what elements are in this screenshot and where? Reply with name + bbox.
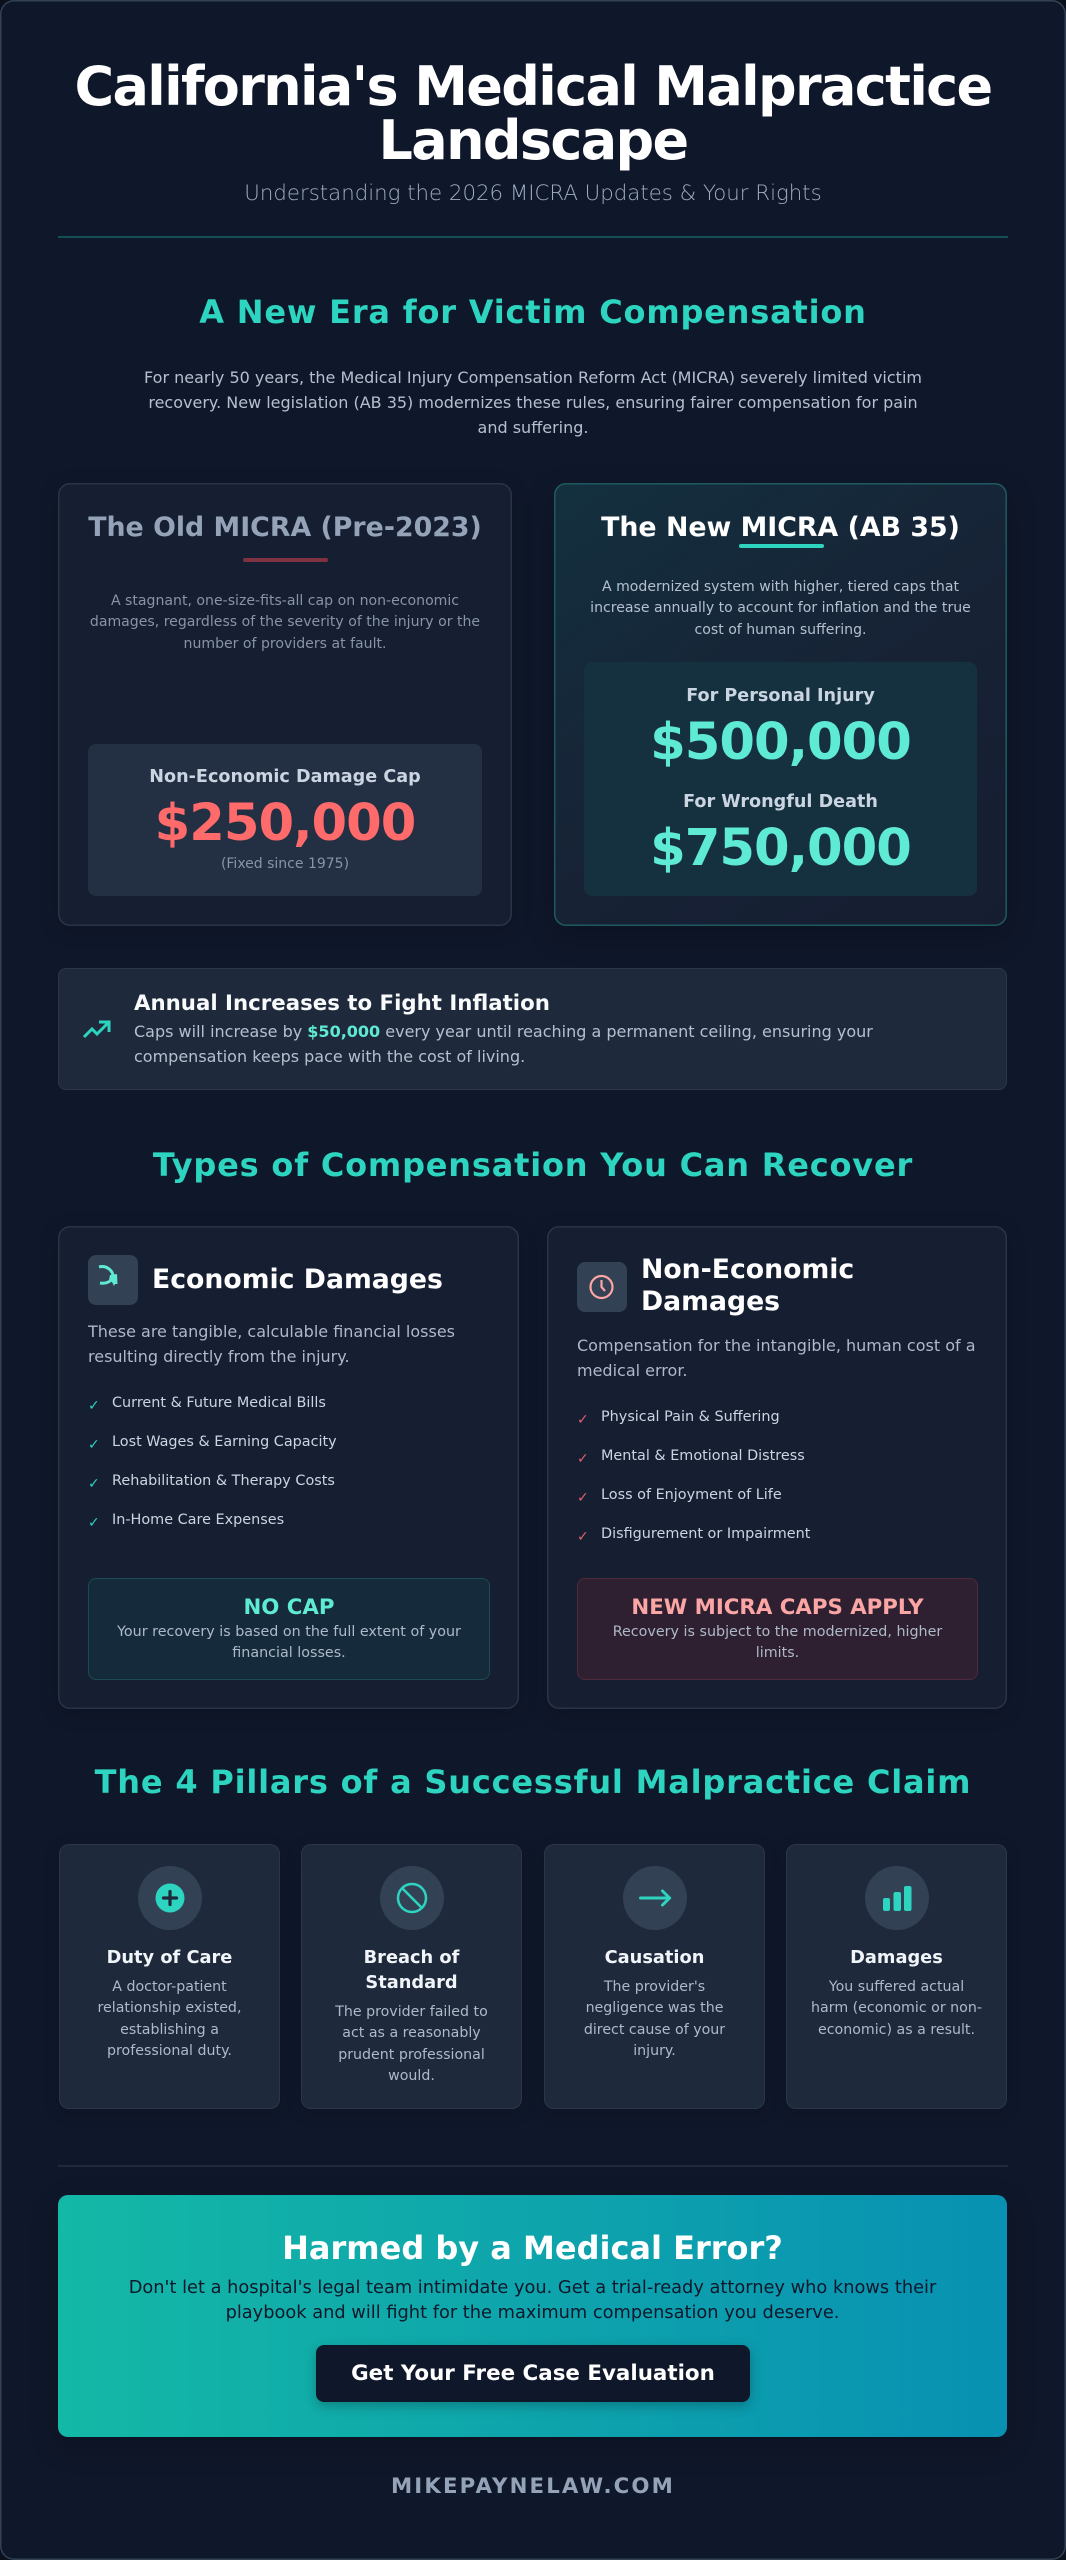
old cap box <box>88 744 482 896</box>
cap note: (Fixed since 1975) <box>221 856 349 872</box>
callout text: Caps will increase by $50,000 every year until reaching a permanent ceiling, ensuring your <box>134 1022 873 1041</box>
pillar text: You suffered actual <box>829 1979 964 1995</box>
icon: arrow <box>623 1866 687 1930</box>
header divider <box>58 236 1008 238</box>
icon: economic <box>88 1255 138 1305</box>
pillar text: The provider failed to <box>335 2004 488 2020</box>
non-economic list: ✓ <box>577 1529 589 1545</box>
wrongful death label: For Wrongful Death <box>683 792 878 812</box>
non-economic description <box>577 1336 976 1380</box>
new MICRA heading: The New MICRA (AB 35) <box>601 512 960 543</box>
callout heading: Annual Increases to Fight Inflation <box>134 991 550 1016</box>
pillar title: Duty of Care <box>107 1947 232 1968</box>
pillar text: The provider's <box>604 1979 705 1995</box>
title <box>74 55 992 172</box>
subtitle: Understanding the 2026 MICRA Updates & Your Rights <box>244 181 822 206</box>
callout: no cap <box>88 1578 490 1680</box>
economic description <box>88 1322 455 1366</box>
panel: non-economic damages <box>547 1226 1007 1709</box>
old MICRA description: number of providers at fault. <box>184 636 386 652</box>
footer divider <box>58 2165 1008 2167</box>
non-economic description: medical error. <box>577 1361 688 1380</box>
section heading: pillars: The 4 Pillars of a Successful Malpractice Claim <box>95 1763 971 1801</box>
title: Landscape <box>379 108 687 172</box>
panel: economic damages <box>58 1226 519 1709</box>
CTA text <box>129 2277 936 2323</box>
CTA button: Get Your Free Case Evaluation <box>351 2361 715 2386</box>
icon: ban <box>380 1866 444 1930</box>
intro paragraph <box>144 368 922 437</box>
section heading: compensation types: Types of Compensation You Can Recover <box>153 1146 913 1184</box>
icon: bars <box>865 1866 929 1930</box>
personal injury label: For Personal Injury <box>686 686 875 706</box>
pillar text: economic) as a result. <box>818 2022 975 2038</box>
CTA text: Don't let a hospital's legal team intimidate you. Get a trial-ready attorney who knows their <box>129 2277 936 2298</box>
economic list: ✓ <box>88 1515 100 1531</box>
old MICRA description <box>90 593 480 652</box>
no cap text: Your recovery is based on the full extent of your <box>117 1624 461 1640</box>
non-economic list: ✓ <box>577 1451 589 1467</box>
pillar text <box>335 2004 488 2084</box>
call to action panel <box>58 2195 1007 2437</box>
cap amount: $250,000 <box>155 793 415 853</box>
CTA text: playbook and will fight for the maximum compensation you deserve. <box>226 2302 839 2323</box>
panel: old MICRA <box>58 483 512 926</box>
economic list: Current & Future Medical Bills <box>112 1395 326 1411</box>
CTA heading: Harmed by a Medical Error? <box>282 2229 783 2267</box>
caps text: Recovery is subject to the modernized, higher <box>613 1624 942 1640</box>
intro paragraph: For nearly 50 years, the Medical Injury Compensation Reform Act (MICRA) severely limited victim <box>144 368 922 387</box>
icon: plus <box>138 1866 202 1930</box>
economic list <box>88 1395 337 1531</box>
non-economic heading: Non-Economic <box>641 1254 854 1285</box>
economic list: Lost Wages & Earning Capacity <box>112 1434 337 1450</box>
non-economic list: Disfigurement or Impairment <box>601 1526 810 1542</box>
pillar text: prudent professional <box>338 2047 485 2063</box>
economic list: ✓ <box>88 1437 100 1453</box>
non-economic heading: Damages <box>641 1286 780 1317</box>
no cap text <box>117 1624 461 1661</box>
non-economic list: Mental & Emotional Distress <box>601 1448 805 1464</box>
pillar: causation <box>544 1844 765 2109</box>
callout: annual increases <box>58 968 1007 1090</box>
non-economic list: Physical Pain & Suffering <box>601 1409 780 1425</box>
economic heading: Economic Damages <box>152 1264 443 1295</box>
economic description: resulting directly from the injury. <box>88 1347 350 1366</box>
economic list: ✓ <box>88 1476 100 1492</box>
no cap heading: NO CAP <box>243 1595 335 1620</box>
pillar text: professional duty. <box>107 2043 232 2059</box>
new MICRA description: increase annually to account for inflation and the true <box>590 600 971 616</box>
pillar text: harm (economic or non- <box>811 2000 982 2016</box>
red underline <box>243 558 328 562</box>
non-economic description: Compensation for the intangible, human cost of a <box>577 1336 976 1355</box>
pillar text: act as a reasonably <box>342 2025 481 2041</box>
old MICRA heading: The Old MICRA (Pre-2023) <box>88 512 482 543</box>
new caps box <box>584 662 977 896</box>
new MICRA description: A modernized system with higher, tiered caps that <box>602 579 959 595</box>
non-economic list <box>577 1409 810 1545</box>
pillar text <box>811 1979 982 2038</box>
callout text: compensation keeps pace with the cost of living. <box>134 1046 525 1066</box>
icon: clock <box>577 1262 627 1312</box>
pillar text: would. <box>388 2068 435 2084</box>
pillar text: A doctor-patient <box>112 1979 227 1995</box>
old MICRA description: A stagnant, one-size-fits-all cap on non-economic <box>111 593 459 609</box>
no cap text: financial losses. <box>232 1645 346 1661</box>
pillar text: relationship existed, <box>98 2000 241 2016</box>
new MICRA description <box>590 579 971 638</box>
pillar text: negligence was the <box>586 2000 723 2016</box>
caps text <box>613 1624 942 1661</box>
title: California's Medical Malpractice <box>74 55 992 118</box>
new MICRA description: cost of human suffering. <box>695 622 866 638</box>
pillar title: Standard <box>365 1972 458 1993</box>
pillar: damages <box>786 1844 1007 2109</box>
pillar: breach of standard <box>301 1844 522 2109</box>
personal injury amount: $500,000 <box>650 712 911 772</box>
callout text <box>134 1022 873 1066</box>
wrongful death amount: $750,000 <box>650 818 911 878</box>
non-economic heading <box>641 1254 854 1317</box>
pillar text: direct cause of your <box>584 2022 725 2038</box>
pillar text: establishing a <box>120 2022 219 2038</box>
section heading: new era: A New Era for Victim Compensation <box>199 293 867 331</box>
economic list: In-Home Care Expenses <box>112 1512 284 1528</box>
pillar title: Causation <box>605 1947 704 1968</box>
non-economic list: ✓ <box>577 1412 589 1428</box>
economic list: Rehabilitation & Therapy Costs <box>112 1473 335 1489</box>
footer website: MIKEPAYNELAW.COM <box>391 2474 675 2499</box>
pillar title <box>364 1947 460 1993</box>
CTA button <box>316 2345 750 2402</box>
non-economic list: ✓ <box>577 1490 589 1506</box>
old MICRA description: damages, regardless of the severity of the injury or the <box>90 614 480 630</box>
non-economic list: Loss of Enjoyment of Life <box>601 1487 782 1503</box>
intro paragraph: and suffering. <box>478 418 588 437</box>
caps text: limits. <box>756 1645 799 1661</box>
pillar text: injury. <box>633 2043 676 2059</box>
pillar: duty of care <box>59 1844 280 2109</box>
economic description: These are tangible, calculable financial losses <box>88 1322 455 1341</box>
pillar text <box>98 1979 241 2059</box>
cap label: Non-Economic Damage Cap <box>149 767 421 787</box>
caps heading: NEW MICRA CAPS APPLY <box>631 1595 924 1620</box>
pillar text <box>584 1979 726 2059</box>
pillar title: Breach of <box>364 1947 459 1968</box>
icon: trending up <box>83 1020 110 1038</box>
callout: new caps apply <box>577 1578 978 1680</box>
panel: new MICRA <box>554 483 1007 926</box>
economic list: ✓ <box>88 1398 100 1414</box>
teal underline <box>739 544 824 548</box>
intro paragraph: recovery. New legislation (AB 35) modernizes these rules, ensuring fairer compensation for pain <box>148 393 918 412</box>
pillar title: Damages <box>850 1947 943 1968</box>
